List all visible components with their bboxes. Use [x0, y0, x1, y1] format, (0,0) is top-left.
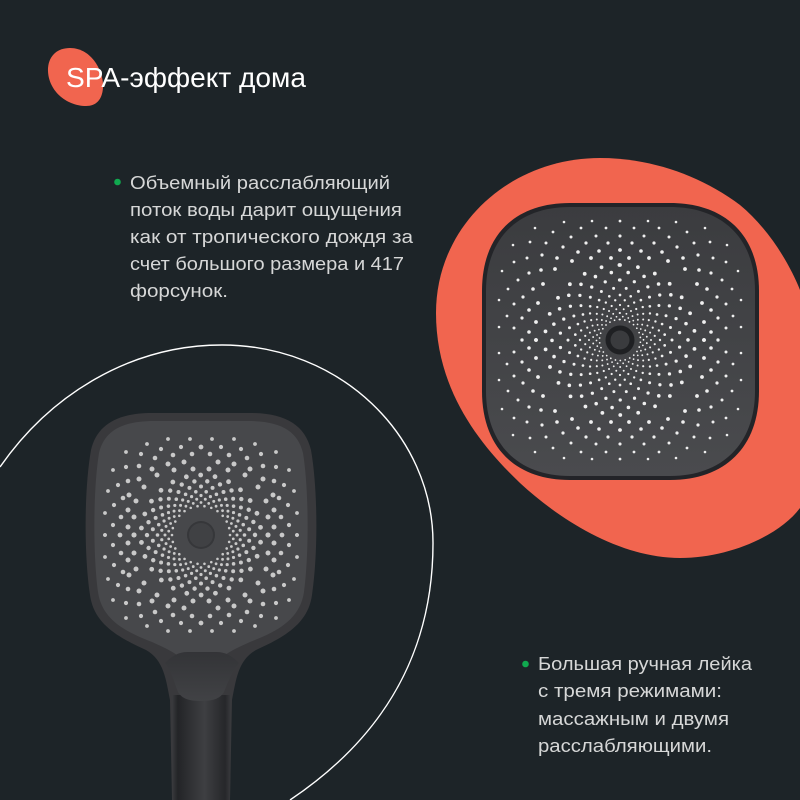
white outline circle [0, 345, 433, 800]
paragraph: hand shower: с тремя режимами: [538, 680, 722, 701]
title blob [48, 48, 103, 106]
paragraph: rain shower: счет большого размера и 417 [130, 253, 404, 274]
bullet: rain shower [114, 179, 121, 185]
paragraph: rain shower: Объемный расслабляющий [130, 172, 390, 193]
paragraph: hand shower: массажным и двумя [538, 708, 729, 729]
nozzle dots [498, 220, 742, 460]
coral blob background [436, 158, 800, 558]
shower face [486, 207, 755, 476]
hand shower body [86, 413, 316, 800]
rain shower head [482, 203, 759, 480]
bullet: hand shower [522, 661, 529, 667]
hand center button [187, 521, 215, 549]
paragraph: hand shower: расслабляющими. [538, 735, 712, 756]
paragraph: rain shower: форсунок. [130, 280, 228, 301]
paragraph: hand shower: Большая ручная лейка [538, 653, 753, 674]
hand shower [86, 413, 316, 800]
title: SPA-эффект дома [66, 62, 306, 93]
hand shower face [94, 421, 308, 660]
shower frame [482, 203, 759, 480]
paragraph: hand shower [538, 653, 753, 756]
text block: hand shower [522, 653, 753, 756]
paragraph: rain shower [130, 172, 414, 301]
text block: rain shower [114, 172, 414, 301]
paragraph: rain shower: поток воды дарит ощущения [130, 199, 402, 220]
center button [606, 326, 634, 354]
paragraph: rain shower: как от тропического дождя за [130, 226, 414, 247]
handle [172, 695, 231, 800]
hand nozzle dots [103, 437, 299, 633]
mode switch button [165, 652, 239, 701]
